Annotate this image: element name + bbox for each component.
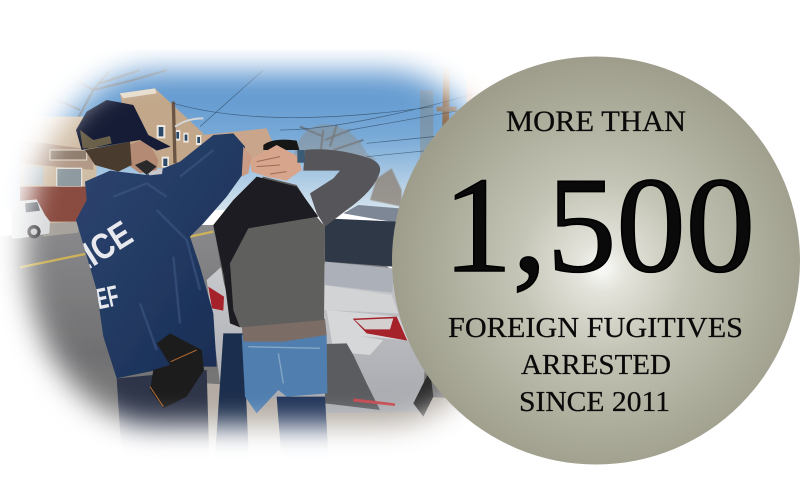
suspect in grey fleece with hands behind head bbox=[213, 140, 380, 446]
jacket lettering: EF bbox=[93, 279, 122, 316]
label: since 2011: SINCE 2011 bbox=[519, 386, 670, 418]
parked white SUV bbox=[12, 199, 50, 238]
label: foreign fugitives: FOREIGN FUGITIVES bbox=[448, 312, 743, 344]
power lines bbox=[173, 70, 500, 157]
sky bbox=[16, 50, 467, 210]
silver car bbox=[207, 205, 433, 417]
big number: 1,500 bbox=[443, 149, 755, 301]
disc background bbox=[392, 56, 800, 464]
road and pavement bbox=[6, 224, 446, 438]
jacket lettering: LICE bbox=[60, 212, 140, 283]
holster and pistol bbox=[150, 333, 204, 408]
jacket lettering bbox=[83, 220, 134, 310]
background trees and buildings bbox=[20, 63, 490, 223]
circle callout bbox=[392, 56, 800, 464]
photo: officer arresting a fugitive beside a car bbox=[6, 50, 479, 448]
officer in navy police jacket bbox=[76, 100, 252, 446]
label: more than: MORE THAN bbox=[506, 105, 686, 138]
label: arrested: ARRESTED bbox=[521, 349, 671, 381]
